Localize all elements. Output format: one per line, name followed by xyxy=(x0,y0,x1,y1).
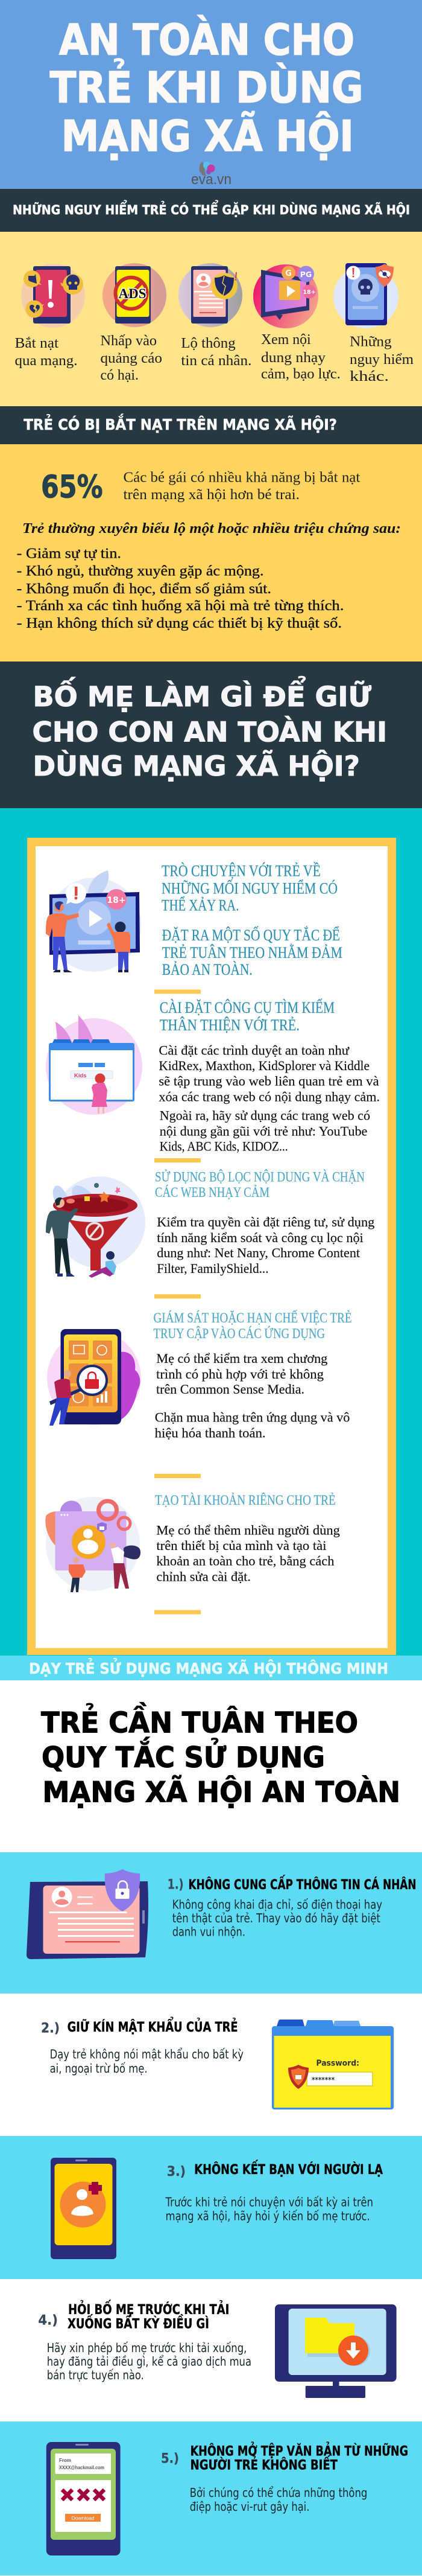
rule heading: 5.) xyxy=(161,2452,179,2467)
caption: other dangers: khác. xyxy=(350,369,389,384)
title xyxy=(50,16,364,161)
rule text: bán trực tuyến nào. xyxy=(47,2368,144,2382)
caption: sensitive content: dung nhạy xyxy=(261,350,326,366)
text: kid-friendly search tools xyxy=(159,999,380,1153)
panel: dangers xyxy=(0,232,422,406)
illustration: password folder: ******* xyxy=(312,2076,335,2084)
heading: children must follow rules xyxy=(41,1703,400,1809)
rule heading: KHÔNG KẾT BẠN VỚI NGƯỜI LẠ xyxy=(194,2160,383,2178)
text: content filters: Kiểm tra quyền cài đặt riêng tư, sử dụng xyxy=(157,1214,374,1229)
rule heading: GIỮ KÍN MẬT KHẨU CỦA TRẺ xyxy=(68,2018,238,2035)
caption: personal info xyxy=(181,336,251,369)
text: monitor apps: GIÁM SÁT HOẶC HẠN CHẾ VIỆC TRẺ xyxy=(153,1310,352,1325)
text: kid-friendly search tools: sẽ tập trung vào web liên quan trẻ em và xyxy=(159,1073,379,1088)
icon: sensitive content TV xyxy=(253,264,318,328)
text: talk and set rules: ĐẶT RA MỘT SỐ QUY TẮC ĐỂ xyxy=(162,926,340,944)
icon: leaked personal info phone xyxy=(178,263,242,327)
list: symptoms: - Không muốn đi học, điểm số giảm sút. xyxy=(17,581,271,597)
text: monitor apps: trên Common Sense Media. xyxy=(156,1382,304,1397)
text: talk and set rules: TRÒ CHUYỆN VỚI TRẺ VỀ xyxy=(162,862,321,880)
caption: other dangers: nguy hiểm xyxy=(350,352,414,368)
rule heading: 4.) xyxy=(38,2313,58,2329)
caption: sensitive content: cảm, bạo lực. xyxy=(261,366,341,382)
text: kid-friendly search tools: nội dung gần gũi với trẻ như: YouTube xyxy=(160,1123,367,1138)
text: content filters xyxy=(155,1168,374,1276)
heading band: what parents do: BỐ MẸ LÀM GÌ ĐỂ GIỮ xyxy=(33,677,371,713)
rule text xyxy=(165,2195,373,2223)
caption: ads: Nhấp vào xyxy=(100,333,157,349)
rule heading xyxy=(41,2018,238,2036)
illustration: suspicious email phone xyxy=(46,2442,121,2555)
text: separate account: trên thiết bị của mình và tạo tài xyxy=(156,1538,327,1553)
text: talk and set rules: TRẺ TUÂN THEO NHẰM ĐẢM xyxy=(162,944,342,961)
stat: 65%: 65% xyxy=(41,470,102,506)
text: monitor apps: Chặn mua hàng trên ứng dụng và vô xyxy=(155,1410,350,1424)
caption: sensitive content xyxy=(261,332,341,382)
rule text xyxy=(190,2485,367,2514)
panel: rule 3 xyxy=(0,2136,422,2279)
illustration: safe search xyxy=(46,1015,142,1115)
rule heading: 3.) xyxy=(167,2164,186,2179)
icon: sensitive content TV: PG xyxy=(300,270,312,279)
text: talk and set rules: BẢO AN TOÀN. xyxy=(162,961,253,978)
text: monitor apps: Mẹ có thể kiểm tra xem chương xyxy=(156,1351,327,1366)
text: monitor apps: TRUY CẬP VÀO CÁC ỨNG DỤNG xyxy=(153,1325,325,1341)
heading band: what parents do: DÙNG MẠNG XÃ HỘI? xyxy=(33,750,360,782)
heading band: bullying xyxy=(0,406,422,444)
rule heading xyxy=(167,2160,383,2179)
rule text xyxy=(50,2047,244,2076)
panel: rule 4 xyxy=(38,2300,397,2398)
text: girls more likely: Các bé gái có nhiều khả năng bị bắt nạt xyxy=(123,470,361,485)
text: separate account: chỉnh sửa cài đặt. xyxy=(156,1569,251,1584)
caption: bullying: qua mạng. xyxy=(14,353,77,369)
rule text: Bởi chúng có thể chứa những thông xyxy=(190,2485,367,2500)
heading: children must follow rules: TRẺ CẦN TUÂN THEO xyxy=(41,1703,358,1739)
icon: harmful ads phone: ADS xyxy=(118,286,146,301)
illustration: add friend phone xyxy=(51,2158,116,2259)
text: kid-friendly search tools: xóa các trang web có nội dung nhạy cảm. xyxy=(159,1089,380,1104)
text: monitor apps: trình có phù hợp với trẻ không xyxy=(156,1366,324,1382)
rule text: Không công khai địa chỉ, số điện thoại hay xyxy=(172,1897,382,1911)
text: girls more likely xyxy=(123,470,361,503)
rule text: điệp hoặc vi-rut gây hại. xyxy=(190,2499,309,2514)
illustration: safe search: Kids xyxy=(74,1073,87,1079)
text: kid-friendly search tools: CÀI ĐẶT CÔNG CỤ TÌM KIẾM xyxy=(160,999,335,1016)
logo: eva.vn: eva.vn xyxy=(191,171,231,188)
caption: other dangers: Những xyxy=(350,334,392,350)
list: symptoms: - Giảm sự tự tin. xyxy=(17,546,121,562)
heading: children must follow rules: QUY TẮC SỬ DỤNG xyxy=(42,1738,325,1774)
title: AN TOÀN CHO xyxy=(59,16,354,65)
list: symptoms xyxy=(17,546,344,631)
caption: bullying xyxy=(14,336,77,369)
rule text: mạng xã hội, hãy hỏi ý kiến bố mẹ trước. xyxy=(165,2208,370,2223)
rule text: Trước khi trẻ nói chuyện với bất kỳ ai trên xyxy=(165,2195,373,2209)
illustration: password folder xyxy=(272,2020,394,2109)
heading band: teach smart use xyxy=(0,1656,422,1680)
illustration: child account settings xyxy=(45,1497,140,1592)
panel: hero xyxy=(0,0,422,189)
text: content filters: Filter, FamilyShield... xyxy=(157,1261,269,1276)
panel: rule 1 xyxy=(0,1852,422,1994)
caption: other dangers xyxy=(350,334,414,384)
rule heading: XUỐNG BẤT KỲ ĐIỀU GÌ xyxy=(68,2314,209,2332)
title: MẠNG XÃ HỘI xyxy=(61,111,354,161)
icon: other dangers phone xyxy=(333,263,398,328)
heading band: bullying: TRẺ CÓ BỊ BẮT NẠT TRÊN MẠNG XÃ HỘI? xyxy=(24,413,337,433)
caption: ads: có hại. xyxy=(100,368,139,383)
title: TRẺ KHI DÙNG xyxy=(50,59,364,112)
list: symptoms: - Khó ngủ, thường xuyên gặp ác mộng. xyxy=(17,564,263,579)
heading band: dangers xyxy=(0,189,422,232)
caption: personal info: tin cá nhân. xyxy=(181,353,251,369)
rule heading: 1.) xyxy=(168,1877,183,1892)
rule text: ai, ngoại trừ bố mẹ. xyxy=(50,2061,148,2076)
rule text: danh vui nhộn. xyxy=(172,1924,245,1939)
illustration: suspicious email phone: Download xyxy=(72,2515,95,2521)
heading: children must follow rules: MẠNG XÃ HỘI AN TOÀN xyxy=(42,1775,400,1809)
text: content filters: SỬ DỤNG BỘ LỌC NỘI DUNG VÀ CHẶN xyxy=(155,1168,365,1184)
rule heading xyxy=(38,2300,229,2332)
list: symptoms: - Hạn không thích sử dụng các thiết bị kỹ thuật số. xyxy=(17,616,342,631)
panel: rule 5 xyxy=(0,2421,422,2575)
list: symptoms: - Tránh xa các tình huống xã hội mà trẻ từng thích. xyxy=(17,598,344,614)
icon: sensitive content TV: G xyxy=(285,269,292,278)
text: content filters: dung như: Net Nany, Chrome Content xyxy=(157,1245,361,1260)
text: separate account: Mẹ có thể thêm nhiều người dùng xyxy=(156,1523,340,1538)
caption: bullying: Bắt nạt xyxy=(14,336,58,351)
text: monitor apps xyxy=(153,1310,352,1440)
panel: bullying statistics xyxy=(0,444,422,662)
text: talk and set rules xyxy=(162,862,342,978)
illustration: parent and child at tablet: 18+ xyxy=(107,896,126,905)
illustration: profile tablet with shield xyxy=(27,1869,148,1959)
text: talk and set rules: NHỮNG MỐI NGUY HIỂM CÓ xyxy=(162,880,338,897)
rule text: tên thật của trẻ. Thay vào đó hãy đặt biệt xyxy=(172,1911,380,1925)
text: content filters: tính năng kiểm soát và công cụ lọc nội xyxy=(157,1230,364,1245)
rule text: hay đăng tải điều gì, kể cả giao dịch mua xyxy=(47,2354,251,2368)
icon: cyberbullying phone xyxy=(21,264,85,328)
illustration: download monitor xyxy=(275,2304,397,2398)
text: girls more likely: trên mạng xã hội hơn bé trai. xyxy=(123,487,300,503)
text: symptoms intro: Trẻ thường xuyên biểu lộ một hoặc nhiều triệu chứng sau: xyxy=(22,521,401,537)
text: separate account: khoản an toàn cho trẻ, bằng cách xyxy=(156,1554,334,1568)
text: kid-friendly search tools: KidRex, Maxthon, KidSplorer và Kiddle xyxy=(159,1058,370,1073)
text: talk and set rules: THỂ XẢY RA. xyxy=(162,897,239,914)
heading band: teach smart use: DẠY TRẺ SỬ DỤNG MẠNG XÃ HỘI THÔNG MINH xyxy=(29,1657,388,1677)
rule text xyxy=(172,1897,382,1939)
panel: parent tips xyxy=(0,808,422,1656)
illustration: password folder: Password: xyxy=(316,2059,359,2068)
caption: personal info: Lộ thông xyxy=(181,336,236,351)
illustration: content filter funnel xyxy=(46,1176,145,1278)
text: content filters: CÁC WEB NHẠY CẢM xyxy=(155,1185,269,1200)
caption: ads xyxy=(100,333,162,383)
rule text xyxy=(47,2341,251,2382)
panel: rule 2 xyxy=(41,2018,394,2109)
heading band: what parents do: CHO CON AN TOÀN KHI xyxy=(33,716,387,748)
heading band: what parents do xyxy=(0,662,422,808)
text: kid-friendly search tools: Ngoài ra, hãy sử dụng các trang web có xyxy=(160,1108,370,1123)
text: kid-friendly search tools: THÂN THIỆN VỚI TRẺ. xyxy=(160,1016,300,1034)
rule heading: 2.) xyxy=(41,2021,60,2036)
rule text: Hãy xin phép bố mẹ trước khi tải xuống, xyxy=(47,2341,247,2355)
logo: eva.vn xyxy=(191,162,231,188)
illustration: suspicious email phone: From xyxy=(59,2458,71,2463)
rule heading xyxy=(161,2443,408,2473)
caption: sensitive content: Xem nội xyxy=(261,332,311,348)
rule heading: HỎI BỐ MẸ TRƯỚC KHI TẢI xyxy=(68,2300,229,2318)
text: separate account xyxy=(155,1493,340,1584)
icon: sensitive content TV: 18+ xyxy=(303,289,316,296)
rule text: Dạy trẻ không nói mật khẩu cho bất kỳ xyxy=(50,2047,244,2062)
rule heading: NGƯỜI TRẺ KHÔNG BIẾT xyxy=(191,2456,338,2473)
icon: harmful ads phone xyxy=(102,263,166,327)
illustration: app monitoring phone xyxy=(47,1329,141,1426)
text: kid-friendly search tools: Kids, ABC Kids, KIDOZ... xyxy=(160,1138,288,1153)
illustration: parent and child at tablet xyxy=(46,870,141,972)
illustration: suspicious email phone: XXXX@hackmail.com xyxy=(59,2465,104,2470)
caption: ads: quảng cáo xyxy=(100,351,162,366)
text: kid-friendly search tools: Cài đặt các trình duyệt an toàn như xyxy=(159,1043,350,1057)
text: separate account: TẠO TÀI KHOẢN RIÊNG CHO TRẺ xyxy=(155,1493,336,1508)
text: monitor apps: hiệu hóa thanh toán. xyxy=(155,1425,266,1440)
